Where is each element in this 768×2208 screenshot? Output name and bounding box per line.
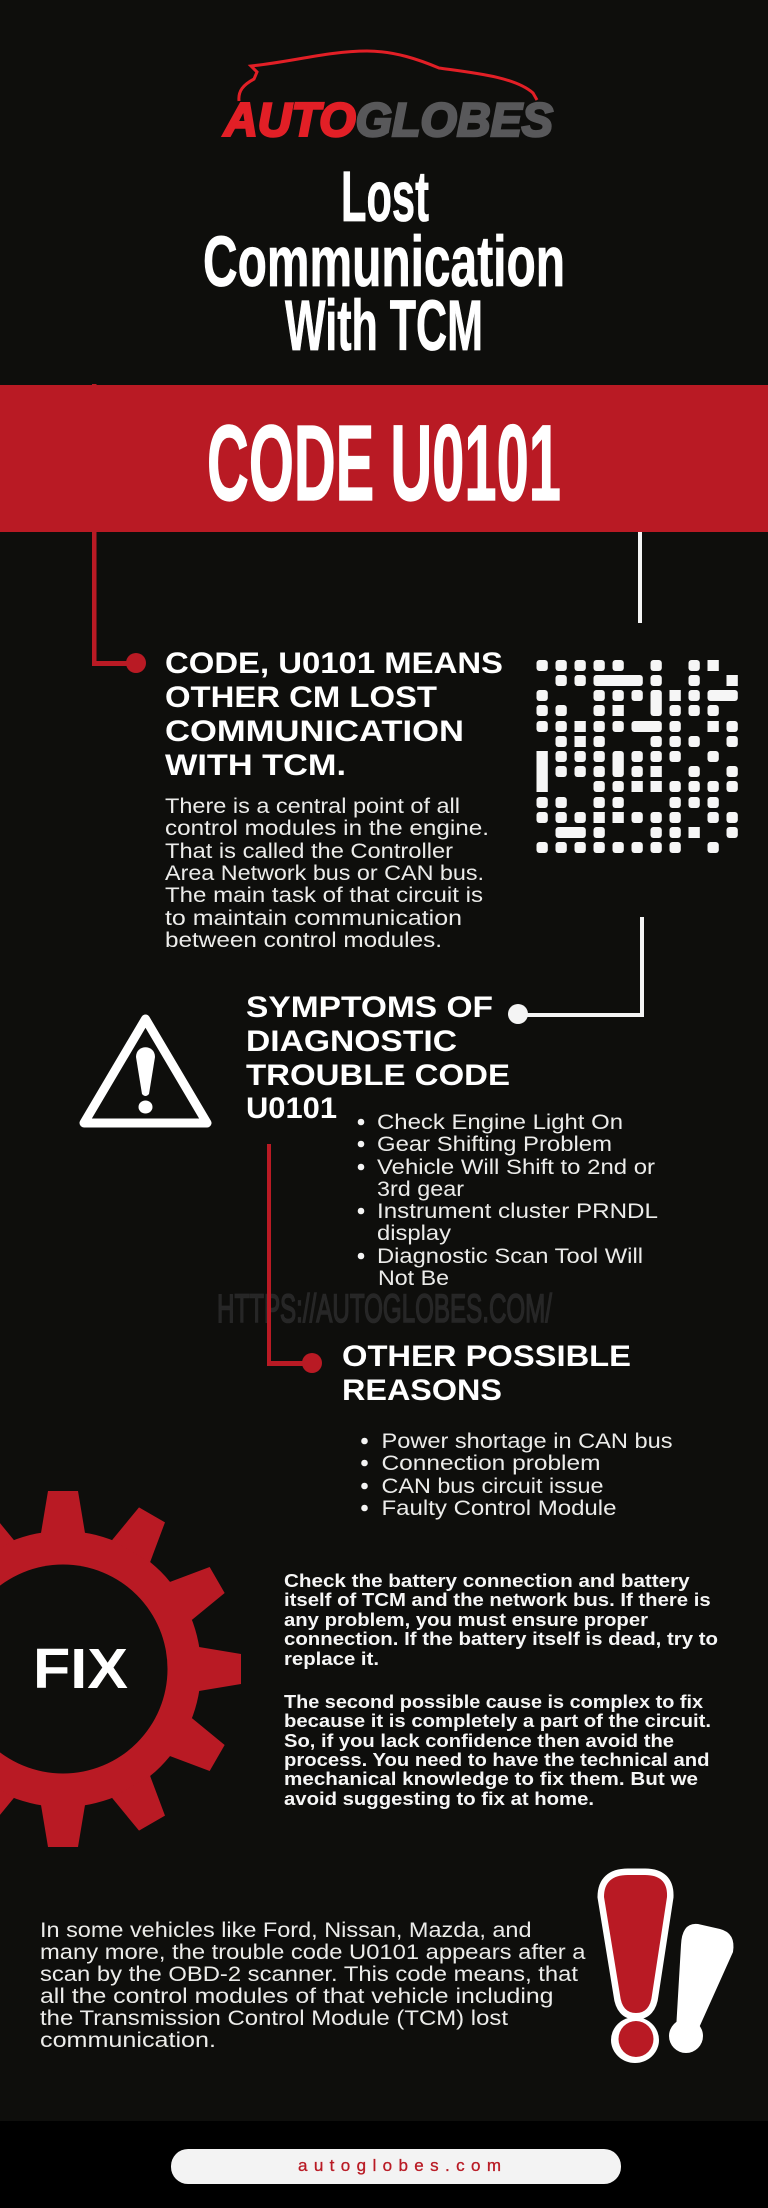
footer pill: website (171, 2149, 621, 2184)
text block: closing paragraph: many more, the trouble code U0101 appears after a (40, 1941, 586, 1964)
icon: warning triangle (84, 1019, 207, 1123)
heading: code meaning: COMMUNICATION (165, 715, 464, 748)
footer pill: website: autoglobes.com (298, 2156, 501, 2175)
watermark: URL: HTTPS://AUTOGLOBES.COM/ (217, 1287, 553, 1331)
text block: fix paragraph two: process. You need to have the technical and (284, 1750, 710, 1770)
text block: CAN bus explanation: between control modules. (165, 929, 442, 952)
text block: fix paragraph one: Check the battery connection and battery (284, 1571, 690, 1591)
text block: closing paragraph: communication. (40, 2029, 216, 2052)
text block: fix paragraph two (284, 1692, 711, 1809)
text block: CAN bus explanation: Area Network bus or CAN bus. (165, 862, 484, 885)
text block: closing paragraph: In some vehicles like Ford, Nissan, Mazda, and (40, 1919, 532, 1942)
connector: white line above dot matrix (638, 532, 642, 623)
heading: symptoms: TROUBLE CODE (246, 1059, 510, 1092)
list: reasons (361, 1430, 672, 1520)
list: symptoms: Check Engine Light On (377, 1111, 623, 1134)
list: symptoms: 3rd gear (377, 1178, 464, 1201)
text block: fix paragraph two: avoid suggesting to fix at home. (284, 1789, 594, 1809)
list: reasons: Power shortage in CAN bus (382, 1430, 672, 1453)
text block: CAN bus explanation: to maintain communication (165, 907, 462, 930)
text block: closing paragraph: scan by the OBD-2 scanner. This code means, that (40, 1963, 578, 1986)
list: symptoms: display (377, 1222, 452, 1245)
text block: CAN bus explanation: There is a central point of all (165, 795, 460, 818)
label: FIX: FIX (33, 1637, 128, 1701)
logo: Autoglobes (223, 51, 553, 146)
text block: closing paragraph (40, 1919, 586, 2052)
title: Communication (203, 223, 565, 302)
list: reasons: Faulty Control Module (382, 1497, 616, 1520)
title: Lost (341, 158, 429, 237)
list: reasons: CAN bus circuit issue (382, 1475, 604, 1498)
title: With TCM (285, 287, 483, 366)
heading: code meaning: OTHER CM LOST (165, 681, 437, 714)
icon: gear with FIX (0, 1491, 241, 1847)
text block: fix paragraph one: replace it. (284, 1649, 379, 1669)
list: symptoms: Instrument cluster PRNDL (377, 1200, 658, 1223)
logo wordmark: AUTOGLOBES (223, 93, 553, 146)
text block: fix paragraph one: connection. If the battery itself is dead, try to (284, 1629, 718, 1649)
list: symptoms: Vehicle Will Shift to 2nd or (377, 1156, 655, 1179)
connector: red line to other reasons (267, 1144, 322, 1373)
heading: code meaning (165, 647, 503, 782)
icon: dot matrix (536, 660, 738, 853)
heading: other reasons (342, 1340, 631, 1407)
connector: red line to first section (92, 384, 146, 673)
list: symptoms: Gear Shifting Problem (377, 1133, 612, 1156)
icon: white exclamation mark (669, 1924, 733, 2053)
connector: white line to symptoms (508, 917, 644, 1024)
text block: fix paragraph two: So, if you lack confidence then avoid the (284, 1731, 674, 1751)
icon: car outline (239, 51, 537, 101)
banner: code U0101 (0, 385, 768, 532)
text block: CAN bus explanation (165, 795, 489, 952)
text block: fix paragraph two: The second possible cause is complex to fix (284, 1692, 703, 1712)
heading: other reasons: REASONS (342, 1374, 502, 1407)
footer strip (0, 2121, 768, 2208)
list: symptoms (358, 1111, 658, 1290)
list: symptoms: Not Be (378, 1267, 449, 1290)
heading: code meaning: WITH TCM. (165, 749, 346, 782)
heading: symptoms: DIAGNOSTIC (246, 1025, 457, 1058)
heading: symptoms: SYMPTOMS OF (246, 991, 493, 1024)
heading: symptoms (246, 991, 510, 1125)
text block: closing paragraph: all the control modules of that vehicle including (40, 1985, 554, 2008)
text block: fix paragraph one (284, 1571, 718, 1669)
heading: symptoms: U0101 (246, 1092, 337, 1125)
text block: CAN bus explanation: control modules in the engine. (165, 817, 489, 840)
text block: fix paragraph two: mechanical knowledge to fix them. But we (284, 1769, 698, 1789)
list: reasons: Connection problem (382, 1452, 600, 1475)
text block: fix paragraph two: because it is completely a part of the circuit. (284, 1711, 711, 1731)
text block: fix paragraph one: any problem, you must ensure proper (284, 1610, 648, 1630)
text block: CAN bus explanation: The main task of that circuit is (165, 884, 483, 907)
heading: code meaning: CODE, U0101 MEANS (165, 647, 503, 680)
list: symptoms: Diagnostic Scan Tool Will (377, 1245, 643, 1268)
text block: CAN bus explanation: That is called the Controller (165, 840, 453, 863)
text block: fix paragraph one: itself of TCM and the network bus. If there is (284, 1590, 711, 1610)
heading: other reasons: OTHER POSSIBLE (342, 1340, 631, 1373)
title (203, 158, 565, 366)
icon: red exclamation mark (604, 1875, 667, 2063)
text block: closing paragraph: the Transmission Control Module (TCM) lost (40, 2007, 508, 2030)
